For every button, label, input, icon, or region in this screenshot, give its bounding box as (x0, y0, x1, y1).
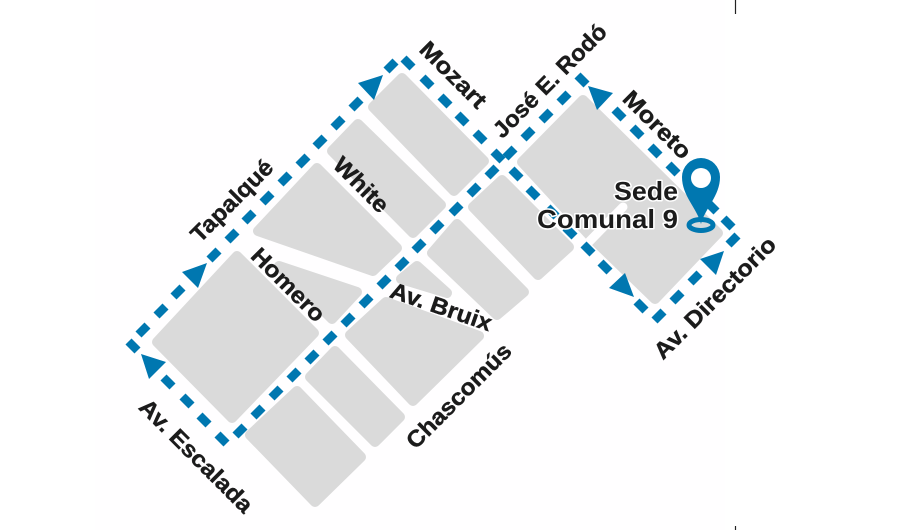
icon: location pin (682, 158, 720, 230)
label: Sede Comunal 9 (537, 176, 678, 234)
block: Escalada corner (157, 256, 314, 418)
block: Bruix south (350, 302, 479, 401)
block: Sede (522, 100, 718, 299)
label: White: White (328, 151, 395, 218)
block: Homero wedge (279, 266, 357, 319)
arrow: Tapalqué south (182, 263, 207, 288)
label: Moreto: Moreto (618, 85, 697, 164)
block: south (250, 391, 361, 502)
route arrows (141, 75, 724, 379)
arrow: Escalada (141, 354, 166, 379)
dashed blue route (128, 58, 738, 444)
arrow: Directorio (700, 251, 724, 275)
label: Tapalqué: Tapalqué (185, 154, 278, 247)
label: Chascomús: Chascomús (401, 338, 517, 454)
label: Mozart: Mozart (414, 36, 493, 114)
street labels (134, 18, 781, 518)
arrow: Rodó south (609, 273, 634, 297)
label: Homero: Homero (246, 242, 331, 327)
block: Bruix triangle (401, 266, 447, 293)
arrow: Tapalqué north (358, 75, 383, 100)
label: Av. Directorio: Av. Directorio (648, 231, 781, 364)
label: Av. Bruix: Av. Bruix (387, 277, 496, 336)
label: Sede Comunal 9: Sede (614, 176, 678, 206)
block: White (332, 124, 441, 233)
city blocks (157, 78, 718, 502)
block: south strip (310, 351, 400, 442)
label: Av. Escalada: Av. Escalada (134, 393, 259, 518)
label: Sede Comunal 9: Comunal 9 (537, 204, 678, 234)
arrow: Moreto (588, 86, 613, 110)
block: Chascomús strip (432, 224, 524, 315)
block: Tapalqué wedge (258, 168, 397, 271)
block: Rodó strip (473, 180, 569, 275)
label: José E. Rodó: José E. Rodó (487, 18, 612, 143)
block: Mozart (373, 78, 484, 191)
